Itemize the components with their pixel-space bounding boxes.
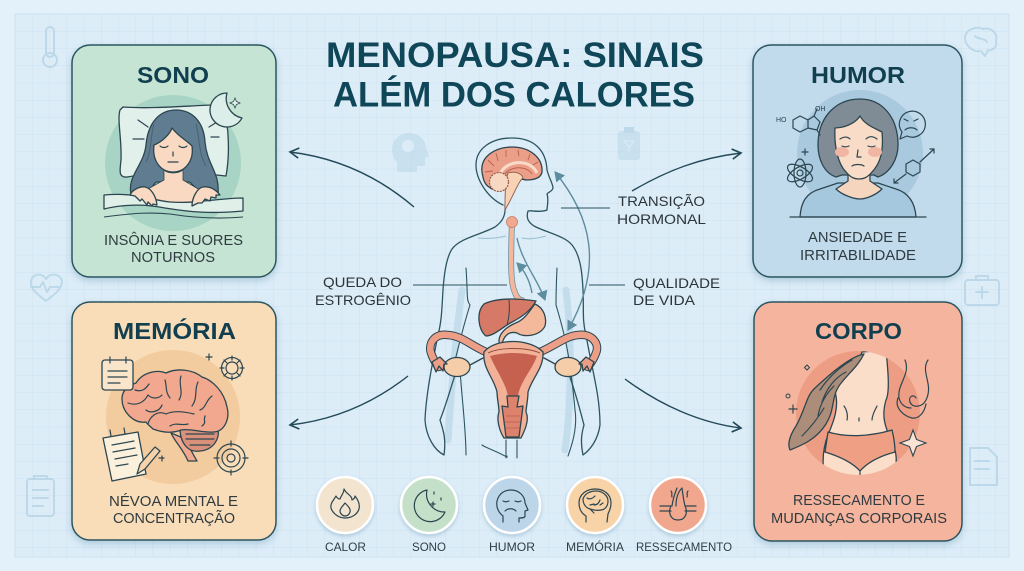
arrow: small ascending — [517, 263, 532, 293]
icon: moon and stars — [414, 490, 445, 522]
description: sono — [104, 232, 243, 266]
label: queda do estrogênio: ESTROGÊNIO — [315, 292, 411, 308]
legend: memória — [566, 477, 624, 554]
label: calor: CALOR — [325, 540, 366, 554]
title: MENOPAUSA: SINAIS — [326, 36, 704, 75]
illustration: brain with notes — [102, 350, 248, 484]
heading: sono: SONO — [137, 62, 209, 88]
heading: memória: MEMÓRIA — [113, 317, 236, 344]
description: memória: CONCENTRAÇÃO — [113, 510, 235, 527]
label: transição hormonal: HORMONAL — [617, 211, 706, 227]
faint icon: clipboard with glass — [618, 127, 640, 160]
icon: brain in head — [579, 489, 611, 522]
stomach — [499, 304, 546, 344]
icon: flame core — [340, 503, 350, 516]
uterus — [484, 342, 543, 438]
label: qualidade de vida — [589, 275, 720, 308]
panel: sono — [72, 45, 276, 277]
illustration: torso with dry hair — [786, 350, 929, 483]
label: queda do estrogênio — [315, 274, 507, 308]
heading: humor: HUMOR — [811, 62, 905, 88]
description: humor: IRRITABILIDADE — [800, 248, 916, 264]
illustration: worried woman: HO — [776, 117, 787, 124]
legend: humor — [484, 477, 540, 554]
label: ressecamento: RESSECAMENTO — [636, 540, 732, 554]
title: ALÉM DOS CALORES — [333, 74, 695, 114]
brain — [482, 147, 542, 210]
central body figure — [425, 138, 600, 458]
description: memória: NÉVOA MENTAL E — [109, 493, 238, 510]
esophagus — [511, 222, 522, 300]
panel: memória — [72, 302, 276, 540]
ovaries — [470, 358, 557, 365]
description: humor: ANSIEDADE E — [808, 230, 907, 246]
faint icon: brain — [965, 28, 996, 56]
arrow: to memória — [290, 376, 408, 425]
legend: sono — [401, 477, 457, 554]
faint icon: heart — [31, 275, 62, 301]
icon: flame — [331, 489, 359, 518]
arrow: to corpo — [625, 379, 741, 428]
fallopian tubes — [430, 335, 486, 367]
description: memória — [109, 493, 238, 527]
illustration: worried woman — [776, 90, 934, 217]
faint icon: medical kit — [965, 276, 999, 305]
label: transição hormonal — [561, 193, 706, 227]
description: corpo — [771, 493, 947, 527]
panel: corpo — [754, 302, 962, 541]
description: corpo: MUDANÇAS CORPORAIS — [771, 511, 947, 527]
description: sono: NOTURNOS — [131, 250, 215, 266]
description: corpo: RESSECAMENTO E — [793, 493, 925, 509]
label: humor: HUMOR — [489, 540, 535, 554]
panel: humor — [753, 45, 962, 277]
arrow: to sono — [290, 152, 414, 207]
label: qualidade de vida: QUALIDADE — [633, 275, 720, 291]
description: sono: INSÔNIA E SUORES — [104, 232, 243, 249]
legend: calor — [317, 477, 373, 554]
body soft shading — [448, 290, 570, 450]
faint icon: clipboard — [27, 476, 54, 516]
arrow: to humor — [632, 153, 741, 191]
body outline — [425, 138, 600, 455]
icon: sad head — [497, 490, 528, 522]
label: sono: SONO — [412, 540, 446, 554]
heading: corpo: CORPO — [815, 318, 902, 344]
faint icon: head — [392, 133, 429, 172]
label: transição hormonal: TRANSIÇÃO — [618, 193, 705, 209]
liver — [479, 299, 536, 336]
description: humor — [800, 230, 916, 264]
faint icon: thermometer — [43, 27, 57, 67]
faint icon: document — [970, 448, 997, 485]
arrow: large curved loop — [555, 172, 589, 330]
label: queda do estrogênio: QUEDA DO — [323, 274, 402, 290]
label: qualidade de vida: DE VIDA — [633, 292, 696, 308]
illustration: worried woman: OH — [815, 106, 826, 113]
label: memória: MEMÓRIA — [566, 539, 624, 554]
title — [326, 36, 704, 114]
arrow: small descending — [517, 238, 545, 300]
illustration: sleeping woman — [104, 93, 243, 231]
legend: ressecamento — [636, 477, 732, 554]
icon: skin and hair — [660, 488, 696, 520]
